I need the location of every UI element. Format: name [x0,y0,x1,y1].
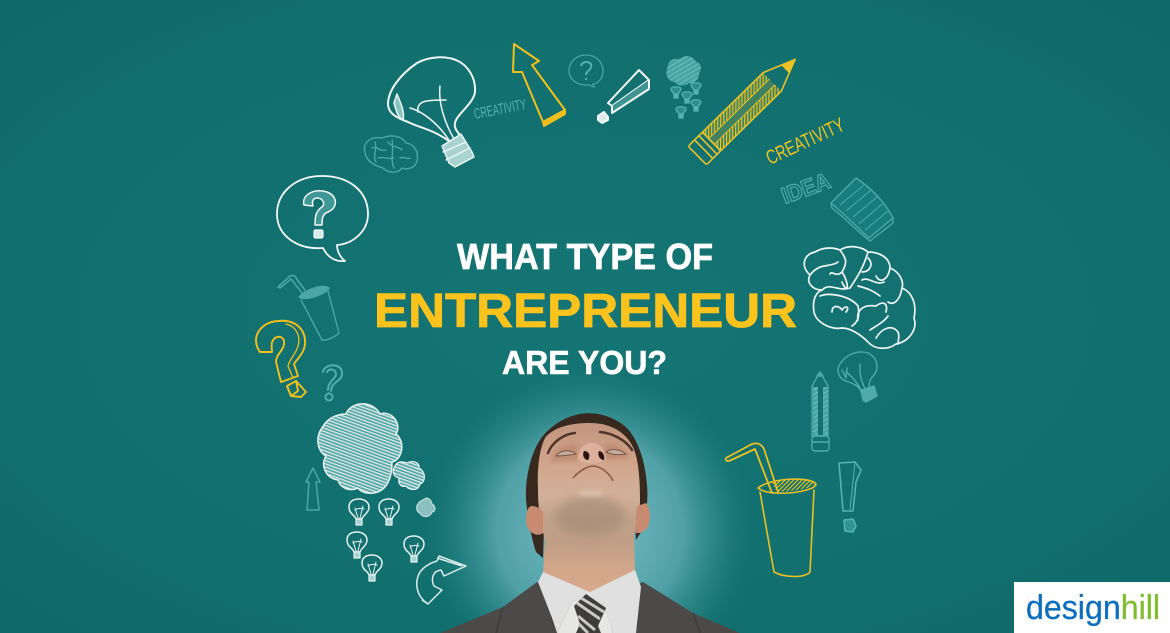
tie [574,594,606,633]
icon: yellow arrow [513,44,565,126]
icon: yellow cup with straw [726,443,816,576]
icon: white curved arrow [417,556,466,604]
mouth [573,466,613,481]
man [440,413,740,633]
logo text: designhill [1026,589,1160,627]
icon: yellow question mark [256,321,306,397]
label: idea teal: IDEA [778,167,834,209]
title line: entrepreneur: ENTREPRENEUR [374,285,797,338]
icon: white light bulb [388,57,475,167]
icon: teal pencil right [812,372,829,451]
icon: white speech bubble with question [277,176,368,261]
ear left [526,506,543,535]
title line: are you: ARE YOU? [502,344,667,381]
icon: small white bulbs [347,499,424,581]
nose [578,443,606,464]
hair [526,413,647,558]
nostrils [583,451,604,460]
label: creativity teal: CREATIVITY [473,96,528,123]
icon: small teal question bubble [569,55,603,87]
jacket [440,582,740,633]
shirt front [557,600,613,633]
icon: teal cloud with small bulbs [666,56,701,118]
title [374,236,797,381]
eyebrows [548,432,632,453]
icon: teal up arrow [306,468,320,510]
icon: small teal question mark [323,365,342,400]
icon: teal light bulb right [838,352,877,402]
icon: teal cup left [278,275,339,340]
eye shadows [551,444,630,462]
icon: teal small brain top [364,136,417,172]
title line: what type of: WHAT TYPE OF [457,236,713,277]
icon: teal exclamation right [839,462,861,532]
stubble shadow [555,496,625,536]
label: creativity yellow: CREATIVITY [763,114,848,170]
chin highlight [578,490,604,496]
collar [538,570,641,633]
ear right [635,503,650,533]
logo panel [1014,582,1170,633]
icon: yellow pencil [688,50,804,165]
icon: hatched white cloud [318,404,435,517]
icon: white brain [804,247,915,348]
eyes [556,450,626,456]
icon: white exclamation [598,70,649,123]
icon: teal notebook [831,178,893,241]
face and neck [538,423,640,596]
